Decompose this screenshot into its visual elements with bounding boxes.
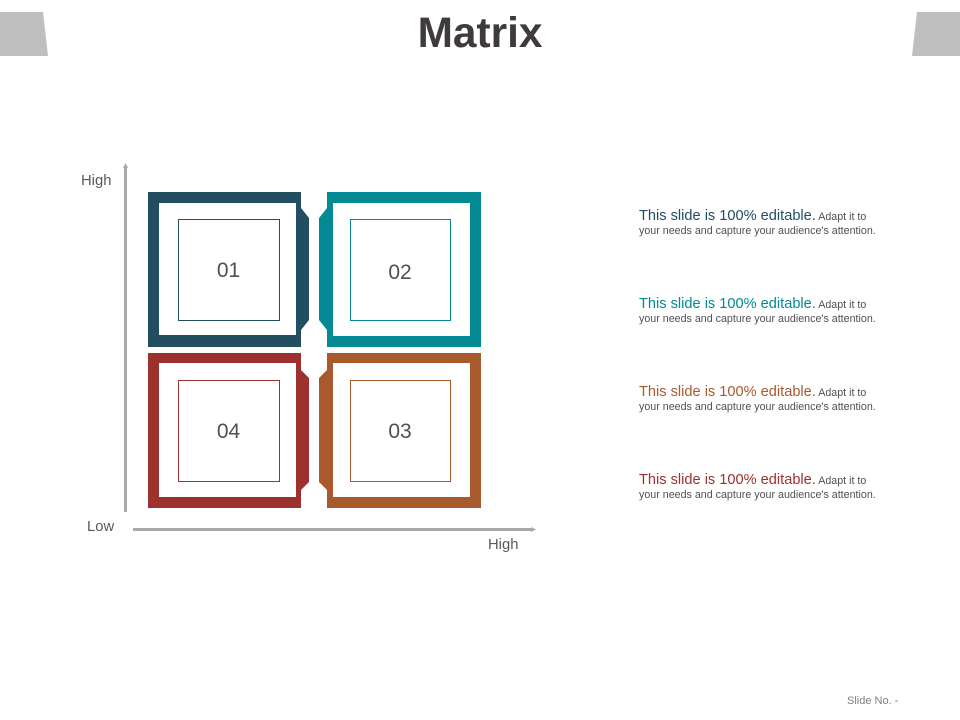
text block 1: This slide is 100% editable. Adapt it to [639,208,866,224]
text block 1 [639,208,876,237]
axis label: high y: High [81,173,111,189]
text block 3: your needs and capture your audience's attention. [639,401,876,413]
quadrant 01: 01 [217,259,240,282]
text block 2: your needs and capture your audience's attention. [639,313,876,325]
text block 1: your needs and capture your audience's attention. [639,225,876,237]
slide number: Slide No. - [847,695,898,707]
quadrant 04: 04 [217,420,240,443]
axis label: low: Low [87,519,114,535]
title: Matrix [418,9,542,56]
text block 4 [639,472,876,501]
text block 2: This slide is 100% editable. Adapt it to [639,296,866,312]
text block 3 [639,384,876,413]
corner tab: top left [0,12,48,56]
quadrant 04 [148,353,309,508]
axis label: high x: High [488,537,518,553]
text block 2 [639,296,876,325]
quadrant 01 [148,192,309,347]
quadrant 03 [319,353,481,508]
text block 4: your needs and capture your audience's attention. [639,489,876,501]
horizontal axis arrow [133,527,536,532]
text block 3: This slide is 100% editable. Adapt it to [639,384,866,400]
text block 4: This slide is 100% editable. Adapt it to [639,472,866,488]
quadrant 02: 02 [388,261,412,284]
quadrant 02 [319,192,481,347]
vertical axis arrow [123,163,128,512]
corner tab: top right [912,12,960,56]
quadrant 03: 03 [388,420,412,443]
